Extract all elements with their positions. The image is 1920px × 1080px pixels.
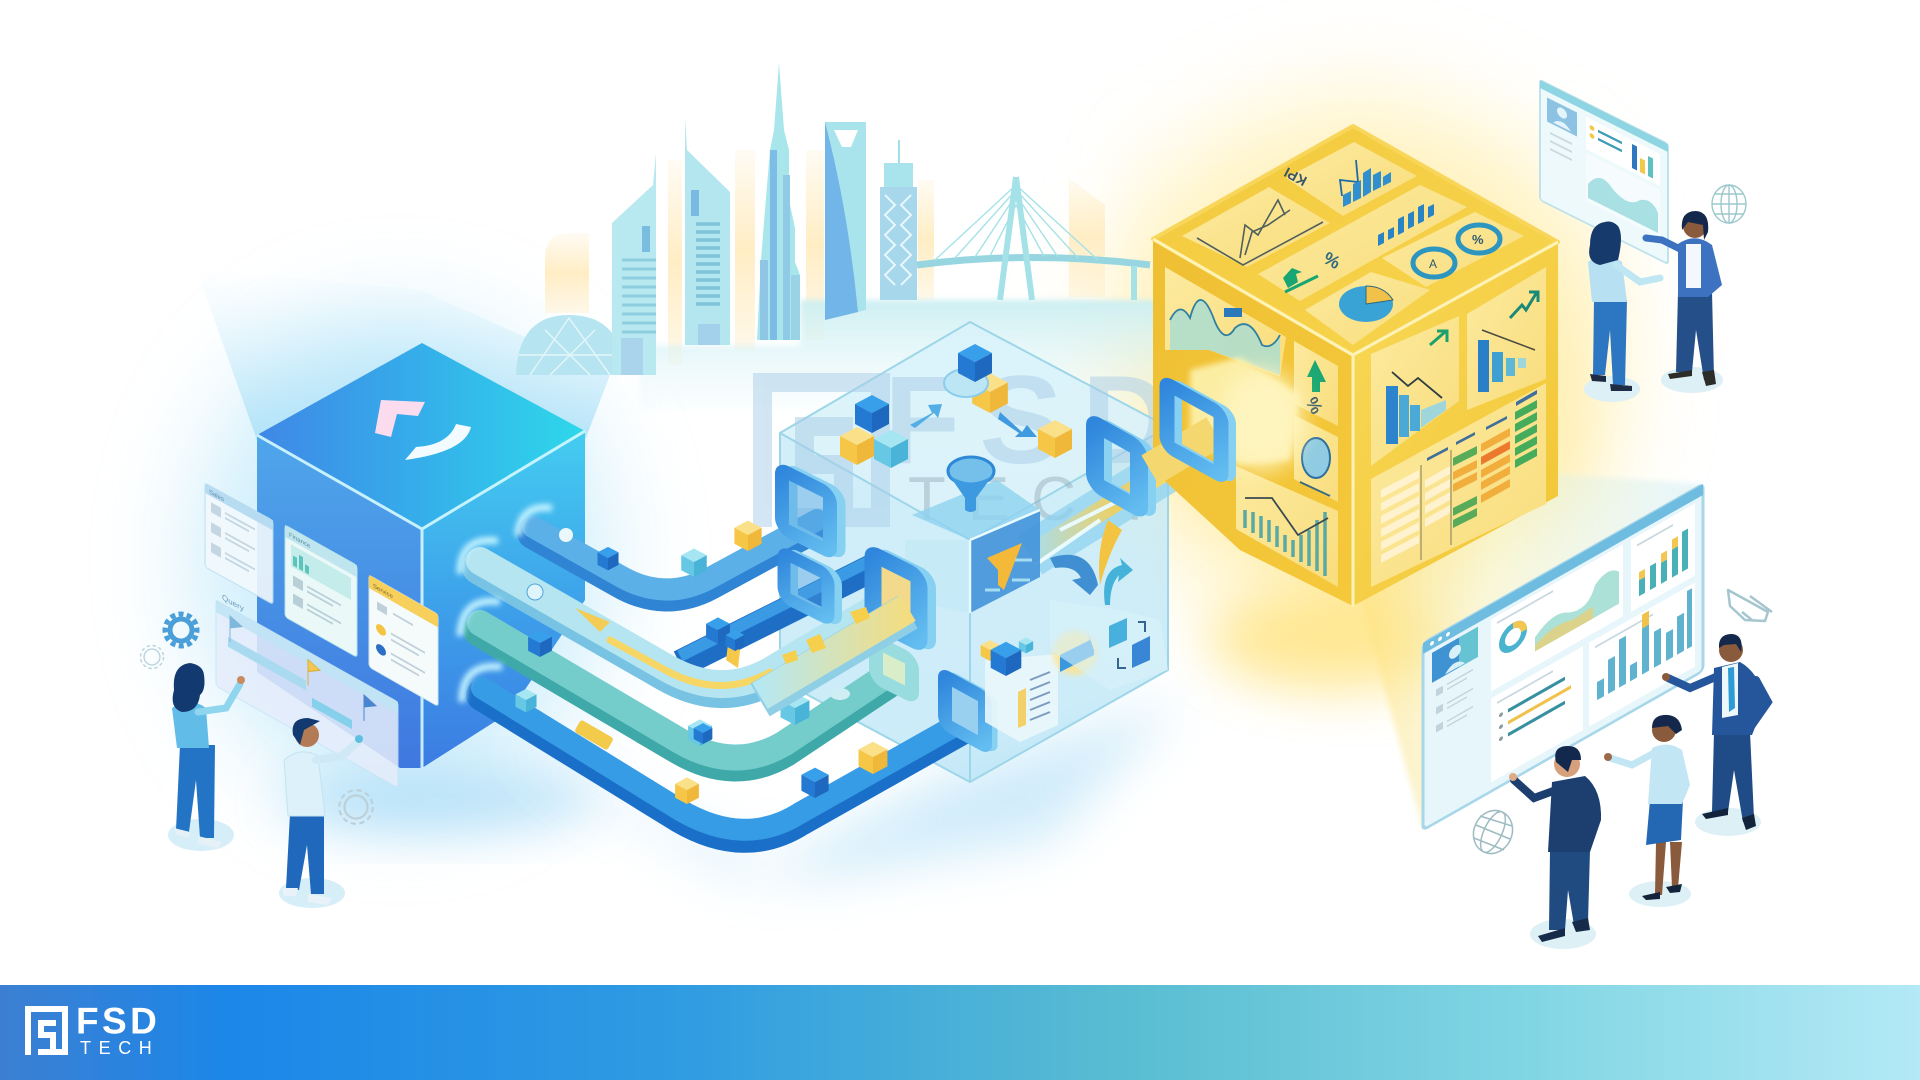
panel: data source card 2 — [285, 525, 357, 657]
person: woman in blue blazer, top right — [1646, 211, 1723, 393]
centre flow pipe — [760, 608, 908, 700]
glass cap where the tube enters the gold cube — [1190, 357, 1300, 465]
background glow: blue source cube — [195, 268, 610, 832]
person: woman at source board — [168, 663, 245, 851]
skyline: Kingdom tower — [825, 122, 866, 320]
skyline: Emirates tower right — [685, 118, 730, 345]
glow at gold entrance — [1220, 368, 1304, 472]
top panel: line chart — [1182, 187, 1330, 267]
port frame bottom — [945, 673, 992, 750]
port frame teal — [876, 642, 912, 696]
panel: translucent workflow board: Query — [222, 592, 244, 614]
footer logo mark — [25, 1006, 68, 1055]
arrow down right — [998, 412, 1037, 437]
watermark: FSD TECH: FSD — [884, 351, 1191, 490]
pipe 4: deep blue — [482, 688, 965, 837]
panel: translucent workflow board — [216, 589, 398, 788]
right panel: falling bars — [1371, 316, 1459, 466]
inner cube icons: cubes and arrows — [840, 344, 1168, 742]
skyline: Emirates tower left — [612, 153, 656, 375]
icon: blue gear — [160, 609, 202, 651]
port at gold cube entrance — [1167, 380, 1230, 481]
port frame second left — [784, 550, 836, 623]
cube logo mark — [375, 400, 471, 460]
pipe 3: teal — [480, 623, 896, 765]
tube entering the gold cube — [1150, 432, 1215, 470]
chart: column chart — [1589, 583, 1695, 727]
gold insights cube — [1150, 126, 1558, 606]
background glow: gold insights cube — [1105, 90, 1620, 690]
top panel: small bars and percent: % — [1320, 248, 1344, 273]
left panel: line over bars — [1236, 466, 1338, 587]
skyline: cable-stayed bridge — [917, 177, 1150, 300]
cube cluster left — [840, 395, 908, 468]
report sheet — [985, 654, 1058, 742]
dashboard sidebar — [1432, 627, 1478, 735]
chart: donut and area — [1491, 544, 1623, 691]
skyline: dome — [516, 315, 625, 375]
left panel: percent up: % — [1301, 394, 1327, 417]
person: man in blue suit with tie — [1662, 634, 1768, 836]
left panel: portrait dial — [1294, 415, 1338, 502]
dashboard title bar — [1423, 484, 1703, 654]
top panel: progress rings: A — [1429, 257, 1437, 271]
cube group above sheet — [981, 637, 1033, 676]
blue cube top face — [257, 343, 585, 529]
right panel: cylinder bars and arrow — [1467, 267, 1546, 410]
footer logo sub wordmark: TECH — [80, 1038, 159, 1058]
top panel: progress rings: % — [1472, 232, 1484, 247]
back conveyor: dark blue — [680, 556, 880, 664]
watermark: FSD TECH — [753, 351, 1191, 534]
icon: lower outline gear — [339, 790, 373, 824]
person: woman with dark hair, top right — [1584, 222, 1660, 402]
transform box with squares — [1050, 600, 1168, 690]
port frame top left — [782, 466, 839, 556]
port frame large centre with gold flow — [873, 550, 929, 648]
top panel: small bars and percent — [1258, 185, 1467, 301]
blue cube left face — [257, 435, 422, 768]
blue cube right face — [422, 431, 585, 768]
skyline: Gulf city silhouettes — [516, 63, 1160, 410]
panel: data source card 3 — [369, 575, 438, 706]
curved teal arrow — [1104, 558, 1133, 605]
background glow: beam to dashboard — [1360, 470, 1703, 830]
right panel: heat table — [1371, 383, 1546, 587]
glass processing cube — [780, 322, 1168, 782]
curved gold sweep — [1099, 520, 1122, 585]
chart: horizontal bars list — [1491, 646, 1583, 782]
inner filter cube — [905, 480, 1040, 613]
panel: data source card 1: Sales — [209, 489, 224, 503]
funnel — [948, 457, 994, 512]
top panel: pie chart — [1305, 272, 1430, 345]
skyline: patterned tower — [880, 140, 917, 300]
yellow cube — [1038, 420, 1072, 458]
yellow gems on centre pipe — [782, 607, 870, 664]
left panel: percent up — [1294, 341, 1338, 426]
panel: data source card 3: Service — [373, 583, 393, 601]
cube cluster top — [944, 344, 1008, 413]
skyline: Burj tower — [757, 63, 800, 340]
person: man in navy suit, back view — [1509, 746, 1601, 949]
pipe 2: pale blue with gold stripe — [480, 561, 899, 690]
top panel: progress rings — [1382, 212, 1524, 287]
icon: globe top right — [1712, 185, 1746, 223]
footer logo: FSD TECH — [25, 1000, 160, 1058]
shadow under pipes — [500, 700, 1180, 880]
watermark: FSD TECH: TECH — [908, 465, 1165, 534]
gold cube top face — [1153, 126, 1558, 355]
panel: data source card 2: Finance — [289, 532, 311, 550]
big pipe to gold cube — [1030, 440, 1215, 565]
mist at skyline base — [640, 300, 1160, 410]
glowing forward arrow — [1053, 631, 1097, 675]
icon: handshake — [1728, 590, 1772, 621]
left panel: wave chart — [1165, 267, 1286, 377]
arrow up right — [910, 404, 942, 428]
footer logo wordmark: FSD — [76, 1000, 160, 1042]
items travelling on pipes — [515, 521, 887, 804]
curved blue arrow — [1050, 555, 1098, 595]
skyline: pale orange background buildings — [545, 150, 1105, 365]
icon: globe lower — [1466, 804, 1520, 860]
gold cube left face — [1153, 239, 1353, 606]
top panel: KPI growth bars: KPI — [1281, 164, 1309, 189]
top panel: KPI growth bars — [1281, 142, 1417, 216]
panel: data source card 1 — [205, 483, 273, 604]
pipe 1: top blue — [533, 520, 817, 596]
chart: stacked bars — [1631, 504, 1695, 612]
port frame right — [1095, 420, 1149, 514]
pipe mouths glow on cube — [460, 508, 552, 702]
icon: small outline gear — [140, 645, 164, 669]
person: man at source board — [279, 718, 363, 908]
blue source cube — [257, 343, 585, 768]
dashboard: main analytics board — [1423, 484, 1703, 830]
person: woman in blue skirt — [1604, 715, 1691, 907]
gold cube right face — [1353, 242, 1558, 606]
dashboard: top-right small board — [1540, 80, 1668, 264]
footer band — [0, 985, 1920, 1080]
